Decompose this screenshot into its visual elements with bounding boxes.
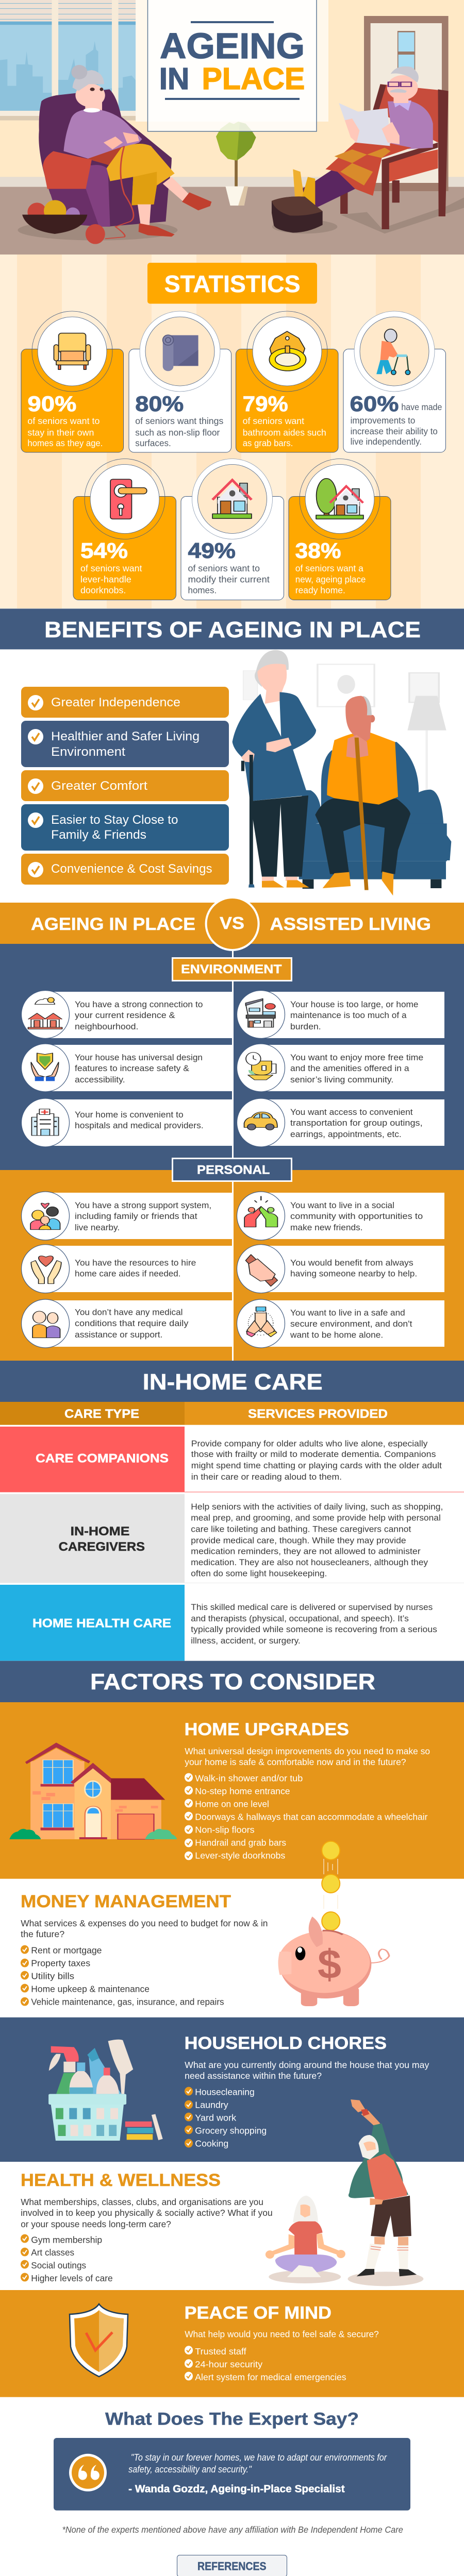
benefit: convenience (21, 854, 229, 885)
environment row: more free time: senior’s living community. (290, 1075, 393, 1084)
care row: caregivers (0, 1494, 464, 1583)
personal row: safe and secure: want to be home alone. (290, 1330, 383, 1340)
care row: companions: CARE COMPANIONS (36, 1452, 169, 1466)
checklist: chores (185, 2087, 267, 2149)
stat card: 90%: homes as they age. (27, 438, 103, 448)
personal row: support system: including family or friends that (75, 1211, 197, 1221)
care row: companions: those with frailty or mild to moderate dementia. Companions (191, 1449, 436, 1459)
care row: caregivers: medication reminders, they are not allowed to administer (191, 1546, 421, 1556)
stat card: 90%: stay in their own (27, 428, 94, 438)
versus header: AGEING IN PLACE (31, 914, 195, 934)
personal row: resources: You have the resources to hire (75, 1258, 196, 1268)
expert quote box: safety, accessibility and security." (128, 2464, 252, 2475)
care row: home health: illness, accident, or surgery. (191, 1636, 301, 1646)
stat card: 54%: of seniors want (80, 563, 142, 573)
factors heading (0, 1661, 464, 1702)
stat card: 38%: new, ageing place (295, 574, 366, 585)
benefit: convenience: Convenience & Cost Savings (51, 862, 212, 876)
stat card: 80%: surfaces. (135, 438, 171, 448)
factor: peace of mind: PEACE OF MIND (185, 2303, 332, 2323)
stat card: 54%: lever-handle (80, 574, 131, 585)
factor: home upgrades (0, 1702, 464, 1879)
checklist: chores: Housecleaning (195, 2087, 255, 2097)
icon: houses and weather (28, 997, 62, 1029)
personal row: no medical conditions (22, 1299, 232, 1348)
personal comparison panel background (0, 1170, 464, 1361)
icon: shield in hands (31, 1053, 59, 1081)
personal row: safe and secure: secure environment, and don't (290, 1319, 412, 1329)
references label (177, 2555, 287, 2576)
icon: non-slip mat (163, 335, 198, 371)
environment comparison panel (0, 944, 464, 1361)
environment row: universal design: features to increase safety & (75, 1063, 190, 1073)
checklist: home upgrades: Lever-style doorknobs (195, 1851, 286, 1861)
stat card: 80%: of seniors want things (135, 416, 224, 426)
table header: SERVICES PROVIDED (248, 1407, 388, 1421)
care row: caregivers: meal prep, and grooming, and some provide help with personal (191, 1513, 441, 1522)
expert quote box: - Wanda Gozdz, Ageing-in-Place Specialist (128, 2484, 345, 2495)
benefit: close to family: Easier to Stay Close to (51, 813, 178, 827)
factor: peace of mind (0, 2290, 464, 2397)
stat card: 54% (73, 459, 176, 600)
care row: companions: might spend time chatting or playing cards with the older adult (191, 1461, 442, 1470)
checklist: health: Gym membership (31, 2234, 102, 2245)
title panel (147, 0, 317, 131)
environment row: hospitals nearby (22, 1098, 204, 1147)
icon: quotation mark (69, 2454, 107, 2492)
factor: money management: the future? (21, 1929, 64, 1939)
factor: home upgrades: What universal design improvements do you need to make so (185, 1746, 430, 1756)
checklist: chores: Grocery shopping (195, 2126, 267, 2136)
title: in place: PLACE (202, 62, 305, 96)
care row: home health: HOME HEALTH CARE (32, 1617, 171, 1631)
benefits list (21, 687, 229, 885)
icon: car (244, 1112, 277, 1130)
checklist: money: Property taxes (31, 1958, 90, 1969)
checklist: chores: Yard work (195, 2113, 236, 2123)
icon: lever door handle (110, 479, 147, 519)
benefit: healthier and safer: Environment (51, 745, 125, 759)
factor: health and wellness: involved in to keep you physically & socially active? What if you (21, 2208, 273, 2218)
checklist: peace of mind (185, 2346, 346, 2382)
checklist: home upgrades (185, 1773, 428, 1861)
benefit: healthier and safer (21, 721, 229, 767)
illustration: house (9, 1742, 177, 1839)
icon: hands holding heart (31, 1256, 61, 1284)
stat card: 49%: modify their current (188, 574, 270, 585)
icon: house and tree (316, 479, 363, 519)
stat card: 80%: 80% (135, 392, 184, 416)
benefit: close to family: Family & Friends (51, 828, 146, 842)
environment row: strong connection: your current residence & (75, 1010, 175, 1020)
checklist: health (21, 2234, 113, 2283)
environment row: hospitals nearby: hospitals and medical providers. (75, 1121, 204, 1130)
personal row: no medical conditions: assistance or support. (75, 1330, 163, 1340)
personal label (172, 1158, 292, 1181)
window light overlay (136, 0, 328, 122)
care row: caregivers: IN-HOME (71, 1524, 129, 1538)
environment row: transportation: You want access to convenient (290, 1107, 413, 1117)
checklist: home upgrades: Doorways & hallways that can accommodate a wheelchair (195, 1812, 428, 1822)
environment row: transportation: earrings, appointments, etc. (290, 1129, 402, 1139)
checklist: home upgrades: No-step home entrance (195, 1786, 290, 1797)
factor: household chores (0, 2018, 464, 2162)
personal label: PERSONAL (197, 1163, 270, 1177)
checklist: home upgrades: Handrail and grab bars (195, 1838, 286, 1848)
care row: companions (0, 1427, 464, 1492)
stat card: 60% (343, 311, 445, 452)
environment row: transportation (237, 1098, 423, 1147)
environment row: strong connection (22, 990, 203, 1039)
statistics panel (0, 255, 464, 608)
illustration: elderly couple with sofa (233, 650, 451, 895)
expert heading: What Does The Expert Say? (105, 2410, 359, 2429)
stat card: 60%: 60% (350, 392, 399, 416)
woman knitting in armchair (22, 65, 211, 244)
personal row: safe and secure (237, 1299, 444, 1348)
stat card: 49%: 49% (188, 538, 236, 563)
stat card: 79%: bathroom aides such (243, 428, 326, 438)
references (55, 2555, 409, 2576)
stat card: 90%: 90% (27, 392, 76, 416)
personal row: someone nearby: You would benefit from always (290, 1258, 413, 1268)
care row: companions: in their care or reading aloud to them. (191, 1472, 342, 1482)
floor shadows (18, 197, 464, 241)
expert quote box (54, 2438, 410, 2511)
environment row: universal design (22, 1044, 203, 1092)
references label: REFERENCES (197, 2560, 267, 2573)
factor: health and wellness: HEALTH & WELLNESS (21, 2171, 221, 2190)
personal row: someone nearby (237, 1245, 444, 1293)
stat card: 38%: ready home. (295, 585, 345, 596)
icon: hospital (31, 1109, 59, 1136)
care row: caregivers: Help seniors with the activities of daily living, such as shopping, (191, 1502, 443, 1512)
benefit: greater independence (21, 687, 229, 718)
disclaimer: *None of the experts mentioned above have any affiliation with Be Independent Home Care (62, 2524, 403, 2535)
stat card: 49%: homes. (188, 585, 217, 596)
factor: money management (21, 1841, 389, 2007)
care row: caregivers: CAREGIVERS (59, 1540, 145, 1554)
stat card: 80% (129, 311, 231, 452)
checklist: chores: Cooking (195, 2139, 228, 2149)
environment row: house too large (237, 990, 419, 1039)
icon: house (212, 480, 252, 518)
personal row: social community: community with opportunities to (290, 1211, 423, 1221)
factor: money management: What services & expenses do you need to budget for now & in (21, 1918, 268, 1928)
vs badge: VS (220, 913, 244, 933)
stat card: 54%: doorknobs. (80, 585, 126, 596)
stat card: 90% (21, 311, 124, 452)
benefits heading (0, 608, 464, 649)
checklist: peace of mind: Trusted staff (195, 2346, 246, 2357)
environment label (172, 958, 292, 981)
icon: large house (245, 998, 275, 1027)
icon: armchair (54, 333, 91, 369)
versus header: ASSISTED LIVING (270, 914, 431, 934)
environment row: strong connection: neighbourhood. (75, 1022, 138, 1031)
benefit: close to family (21, 804, 229, 851)
table header (0, 1402, 464, 1425)
personal row: no medical conditions: You don’t have any medical (75, 1308, 183, 1317)
benefit: healthier and safer: Healthier and Safer Living (51, 730, 200, 743)
factor: health and wellness (21, 2099, 423, 2286)
stat card: 60%: live independently. (351, 436, 422, 447)
table header: CARE TYPE (64, 1407, 139, 1421)
factor: household chores: need assistance within the future? (185, 2071, 322, 2081)
illustration: cleaning supplies basket (48, 2040, 163, 2141)
care row: caregivers: often do some light housekeeping. (191, 1568, 327, 1578)
floor and skirting (0, 177, 464, 255)
factor: home upgrades: your home is safe & comfortable now and in the future? (185, 1757, 406, 1767)
checklist: money: Rent or mortgage (31, 1945, 102, 1956)
checklist: health: Art classes (31, 2247, 74, 2258)
personal row: support system (22, 1192, 232, 1240)
environment row: more free time: and the amenities offered in a (290, 1063, 409, 1073)
personal row: someone nearby: having someone nearby to help. (290, 1269, 417, 1279)
environment left rows (46, 992, 444, 1146)
illustration: piggy bank with coins: $ (318, 1941, 341, 1987)
factor: household chores: HOUSEHOLD CHORES (185, 2033, 387, 2053)
stat card: 49%: of seniors want to (188, 563, 260, 573)
factor: health and wellness: What memberships, classes, clubs, and organisations are you (21, 2197, 263, 2207)
stat card: 60%: increase their ability to (351, 426, 438, 436)
personal row: support system: live nearby. (75, 1223, 120, 1232)
checklist: health: Higher levels of care (31, 2273, 113, 2283)
personal row: safe and secure: You want to live in a safe and (290, 1308, 405, 1318)
care table (0, 1402, 464, 1661)
stat card: 54%: 54% (80, 538, 128, 563)
environment row: house too large: Your house is too large, or home (290, 999, 419, 1009)
stat card: 60%: have made (401, 402, 442, 412)
care row: home health: typically provided while someone is recovering from a serious (191, 1624, 437, 1634)
stat card: 38%: 38% (295, 538, 341, 563)
title: ageing: AGEING (160, 26, 305, 66)
care row: caregivers: medication. They are also not housecleaners, although they (191, 1557, 428, 1567)
checklist: home upgrades: Non-slip floors (195, 1825, 255, 1835)
environment row: house too large: maintenance is too much of a (290, 1010, 407, 1020)
hero illustration (0, 0, 464, 255)
checklist: chores: Laundry (195, 2100, 228, 2110)
checklist: home upgrades: Home on one level (195, 1799, 269, 1809)
care row: caregivers: provide medical care, though. While they may provide (191, 1536, 406, 1546)
environment row: more free time: You want to enjoy more free time (290, 1053, 423, 1062)
checklist: peace of mind: Alert system for medical emergencies (195, 2372, 346, 2382)
potted plant (216, 122, 256, 206)
stat card: 79% (236, 311, 338, 452)
vs badge (206, 897, 259, 950)
door (364, 16, 449, 191)
statistics heading (147, 263, 317, 304)
statistics heading: STATISTICS (164, 270, 301, 297)
checklist: health: Social outings (31, 2260, 86, 2270)
personal row: social community: You want to live in a social (290, 1200, 394, 1210)
checklist: money (21, 1945, 224, 2007)
benefits heading: BENEFITS OF AGEING IN PLACE (44, 617, 421, 642)
in-home care heading (0, 1361, 464, 1402)
icon: clock and teacup (246, 1053, 276, 1080)
factor: money management: MONEY MANAGEMENT (21, 1892, 231, 1911)
environment row: universal design: Your house has universal design (75, 1053, 203, 1062)
care row: companions: Provide company for older adults who live alone, especially (191, 1438, 428, 1449)
icon: hands together (246, 1307, 277, 1337)
benefit: greater comfort: Greater Comfort (51, 779, 147, 793)
icon: helping handshake (245, 1255, 277, 1286)
stat card: 79%: as grab bars. (243, 438, 293, 448)
personal row: support system: You have a strong support system, (75, 1200, 211, 1210)
checklist: peace of mind: 24-hour security (195, 2359, 262, 2369)
environment row: house too large: burden. (290, 1022, 321, 1031)
stat card: 38% (289, 459, 391, 600)
factor: health and wellness: or your spouse needs long-term care? (21, 2219, 171, 2229)
factor: household chores: What are you currently doing around the house that you may (185, 2060, 429, 2070)
benefit: greater comfort (21, 770, 229, 801)
care row: home health: and therapists (physical, occupational, and speech). It’s (191, 1614, 409, 1623)
stat card: 80%: such as non-slip floor (135, 428, 220, 438)
care row: home health: This skilled medical care is delivered or supervised by nurses (191, 1602, 433, 1612)
benefit: greater independence: Greater Independence (51, 696, 180, 709)
illustration: piggy bank with coins (278, 1841, 389, 2006)
personal row: resources (22, 1245, 232, 1293)
care row: caregivers: care like toileting and bathing. These caregivers cannot (191, 1524, 411, 1534)
personal row: resources: home care aides if needed. (75, 1269, 180, 1279)
man reading in chair (272, 66, 449, 233)
checklist: home upgrades: Walk-in shower and/or tub (195, 1773, 303, 1784)
environment label: ENVIRONMENT (181, 962, 282, 976)
checklist: money: Vehicle maintenance, gas, insurance, and repairs (31, 1997, 224, 2007)
stat card: 60%: improvements to (351, 415, 415, 426)
environment row: hospitals nearby: Your home is convenient to (75, 1110, 184, 1120)
personal row: social community: make new friends. (290, 1223, 363, 1232)
icon: person with walker (376, 329, 410, 375)
stat card: 49% (181, 459, 284, 600)
title: in place: IN (159, 62, 189, 96)
factors heading: FACTORS TO CONSIDER (90, 1669, 375, 1694)
stat card: 79%: of seniors want (243, 416, 304, 426)
environment row: more free time (237, 1044, 423, 1092)
environment row: transportation: transportation for group outings, (290, 1118, 423, 1128)
checklist: money: Utility bills (31, 1971, 74, 1981)
environment row: strong connection: You have a strong connection to (75, 999, 203, 1009)
factor: home upgrades: HOME UPGRADES (185, 1720, 349, 1739)
icon: family with heart (30, 1203, 60, 1230)
icon: elderly couple (32, 1311, 60, 1338)
versus header (0, 903, 464, 944)
icon: high five (244, 1196, 277, 1227)
personal row: no medical conditions: conditions that require daily (75, 1318, 189, 1328)
icon: security shield (70, 2304, 128, 2377)
stat card: 79%: 79% (243, 392, 288, 416)
personal row: social community (237, 1192, 444, 1240)
expert quote box: "To stay in our forever homes, we have to adapt our environments for (131, 2452, 387, 2463)
in-home care heading: IN-HOME CARE (143, 1369, 323, 1395)
illustration: seniors exercising (266, 2099, 423, 2286)
environment row: universal design: accessibility. (75, 1075, 125, 1084)
stat card: 38%: of seniors want a (295, 563, 363, 573)
stat card: 90%: of seniors want to (27, 416, 100, 426)
factor: peace of mind: What help would you need to feel safe & secure? (185, 2329, 379, 2340)
care row: home health (0, 1585, 437, 1661)
window with skyline (0, 0, 136, 121)
icon: grab handle (269, 331, 306, 371)
checklist: money: Home upkeep & maintenance (31, 1984, 150, 1994)
